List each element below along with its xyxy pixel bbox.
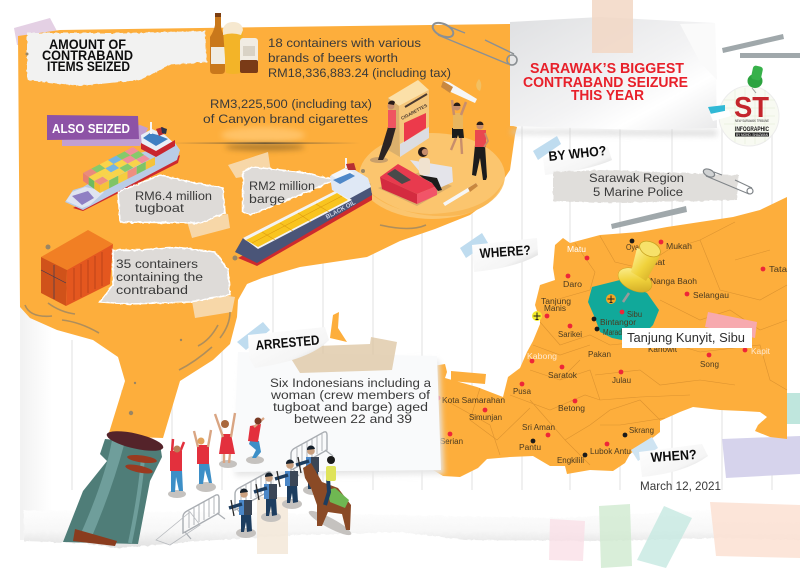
by who heading card: BY WHO? (548, 143, 607, 164)
map town labels: Daro (563, 280, 583, 289)
arrested paper panel: Six Indonesians including a (270, 376, 431, 390)
heading: amount of contraband items seized: ITEMS SEIZED (47, 59, 130, 74)
map town labels: Tanjung (541, 297, 571, 306)
logo: ST badge: NEW SARAWAK TRIBUNE (735, 118, 769, 123)
arrested paper panel: between 22 and 39 (294, 412, 412, 426)
tugboat label (118, 175, 230, 238)
map town labels: Song (700, 360, 719, 369)
map town labels: Lubok Antu (590, 447, 631, 456)
title paper: THIS YEAR (571, 88, 644, 104)
map town labels: Tata (769, 265, 788, 274)
map town labels: Sibu (627, 310, 642, 319)
illustration: crowd barriers (156, 432, 333, 545)
arrested paper panel (233, 312, 444, 476)
logo: ST badge: INFOGRAPHIC (735, 127, 770, 133)
heading: amount of contraband items seized: CONTRABAND (42, 48, 133, 63)
icons: airports (532, 294, 616, 321)
arrested paper panel: woman (crew members of (270, 388, 431, 402)
map town labels: Serian (440, 437, 463, 446)
icon: safety pin on label (702, 167, 753, 194)
arrested heading card (237, 322, 329, 368)
text: cigarettes seized: RM3,225,500 (including tax) (210, 97, 372, 111)
icon: beer bottle, glass and can (210, 13, 258, 74)
logo: ST badge: BY MOHD. SHAZWAN (736, 133, 768, 137)
map town labels: Kota Samarahan (442, 396, 505, 405)
decorative dots (26, 52, 365, 415)
decorative metal bars (611, 34, 800, 229)
illustration: riot police (229, 445, 323, 538)
logo: ST badge (708, 65, 779, 146)
by who text: Sarawak Region (589, 171, 684, 185)
highlighted Sibu division (588, 280, 659, 340)
containers label: containing the (116, 270, 203, 284)
by who heading card (533, 136, 612, 175)
containers label: 35 containers (116, 257, 198, 271)
map town labels: Nanga Baoh (650, 277, 697, 286)
text: beers seized (268, 36, 451, 80)
map town labels: Engkilili (557, 456, 584, 465)
map town labels: Betong (558, 404, 585, 413)
map town labels: Kabong (527, 352, 557, 361)
by who text: 5 Marine Police (593, 185, 683, 199)
icon: container tugboat (65, 122, 180, 211)
icon: green bottle neck (63, 427, 165, 546)
text: beers seized: brands of beers worth (268, 51, 398, 65)
icon: golden map pin (614, 238, 663, 302)
map town labels: alat (650, 258, 666, 267)
date text: March 12, 2021 (640, 479, 721, 493)
text: beers seized: 18 containers with various (268, 36, 421, 50)
map town labels: Pantu (519, 443, 541, 452)
arrested paper panel: tugboat and barge) aged (273, 400, 428, 414)
icon: safety pin over title (430, 20, 517, 65)
containers label (100, 247, 235, 318)
orange bottle-shaped panel (18, 24, 517, 438)
icon: shipping container (41, 230, 113, 306)
map town labels: Selangau (693, 291, 729, 300)
heading: amount of contraband items seized (27, 31, 207, 86)
map town labels: Kapit (751, 347, 771, 356)
map town labels: Saratok (548, 371, 578, 380)
map town labels: Manis (544, 304, 566, 313)
arrested heading card: ARRESTED (255, 332, 320, 353)
text: cigarettes seized (203, 97, 372, 126)
map town labels: Mukah (666, 242, 692, 251)
also seized tag: ALSO SEIZED (52, 121, 130, 136)
map town dots (436, 239, 765, 457)
text: cigarettes seized: of Canyon brand cigarettes (203, 112, 368, 126)
where heading card: WHERE? (479, 242, 531, 261)
map town labels: Pakan (588, 350, 611, 359)
background paper sheet (20, 120, 800, 548)
tugboat label: tugboat (135, 201, 185, 215)
orange map of Sarawak (433, 197, 787, 477)
map town labels: Simunjan (469, 413, 502, 422)
decorative shelf shadow (170, 127, 360, 150)
illustration: arrested people with hands up (168, 413, 264, 498)
illustration: people and cigarette packs (359, 79, 505, 219)
decorative bottle swirl lines (25, 225, 426, 370)
title paper (510, 0, 717, 136)
when heading card (631, 437, 708, 477)
containers label: contraband (116, 283, 188, 297)
map town labels: Marad (603, 328, 622, 337)
map town labels: Kanowit (648, 345, 678, 354)
illustration: mounted police officer (303, 456, 354, 539)
also seized tag (47, 115, 148, 146)
map town labels: Oya (626, 243, 639, 252)
map town labels: Sarikei (558, 330, 582, 339)
map town labels: Pusa (513, 387, 532, 396)
map town labels: Matu (567, 245, 586, 254)
tugboat label: RM6.4 million (135, 189, 212, 203)
text: beers seized: RM18,336,883.24 (including tax) (268, 66, 451, 80)
map town labels: Bintangor (600, 318, 636, 327)
map town labels (440, 242, 788, 465)
map town labels: Sri Aman (522, 423, 555, 432)
by who text (553, 170, 738, 203)
icon: barge: BLACK OIL (325, 200, 357, 221)
map town labels: Skrang (629, 426, 654, 435)
title paper: SARAWAK’S BIGGEST (530, 61, 684, 77)
title paper: CONTRABAND SEIZURE (523, 75, 688, 91)
map town labels: Julau (612, 376, 631, 385)
when heading card: WHEN? (650, 447, 697, 465)
heading: amount of contraband items seized: AMOUNT OF (49, 37, 126, 52)
location callout (622, 312, 757, 348)
barge label: barge (249, 192, 285, 206)
logo: ST badge: ST (734, 92, 769, 124)
location callout: Tanjung Kunyit, Sibu (627, 330, 745, 345)
icon: barge (235, 158, 372, 266)
barge label (228, 152, 335, 215)
illustration: people and cigarette packs: CIGARETTES (400, 103, 428, 121)
barge label: RM2 million (249, 179, 315, 193)
where heading card (460, 233, 538, 272)
